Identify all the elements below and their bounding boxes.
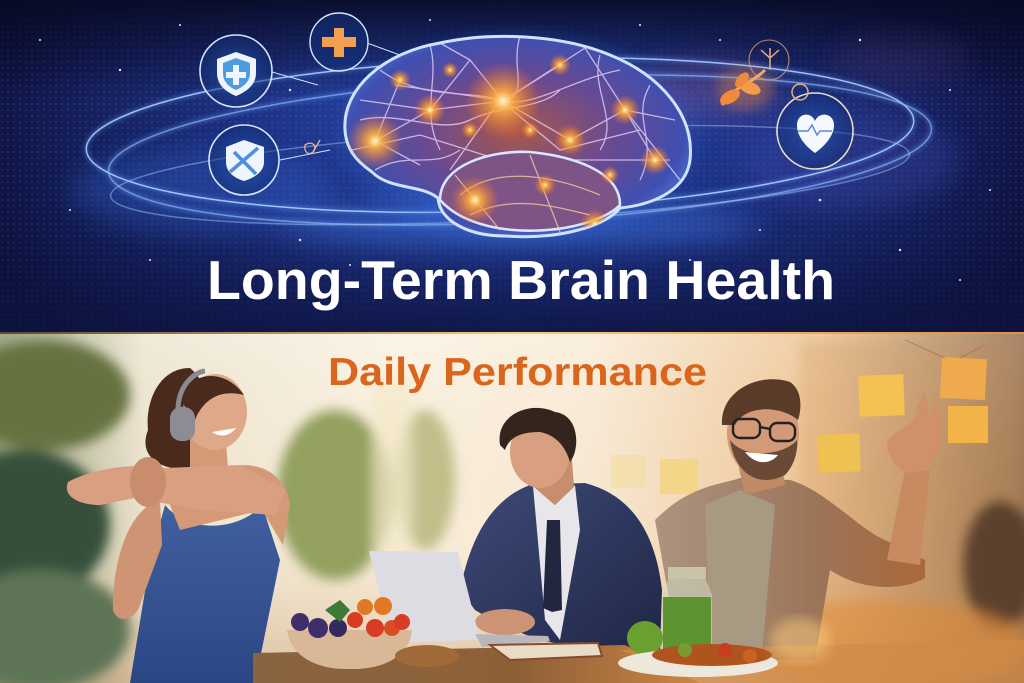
shirt: [533, 485, 580, 640]
person: man at laptop: [460, 408, 662, 650]
inner tee: [705, 490, 775, 655]
green smoothie jar: [662, 567, 712, 652]
person: woman stretching: [67, 368, 290, 683]
stars: [39, 19, 991, 281]
shirt: [655, 478, 925, 660]
divider line: [0, 332, 1024, 334]
broccoli: [627, 621, 663, 655]
tie: [543, 520, 562, 612]
torso top: [130, 505, 280, 683]
warm light overlay: [770, 618, 830, 662]
sticky notes: [611, 340, 988, 494]
nuts: [395, 645, 459, 667]
smile: [212, 428, 236, 435]
orbit rings: [82, 54, 936, 229]
beard: [730, 440, 797, 480]
icon: heart with pulse: [777, 84, 853, 169]
hand: [887, 392, 942, 473]
panel: daily performance: [0, 334, 1024, 683]
panel: long-term brain health: [0, 0, 1024, 333]
glasses: [733, 419, 795, 441]
left arm: [113, 500, 162, 619]
smile: [745, 452, 778, 462]
laptop: [369, 551, 550, 647]
face: [510, 432, 570, 488]
temporal lobe: [440, 152, 620, 231]
icon: shield with plus: [200, 35, 318, 107]
hair: [500, 408, 576, 462]
warm background right: [765, 338, 1024, 682]
trees left: [0, 340, 455, 683]
food plate: [618, 643, 778, 677]
hair: [145, 368, 200, 468]
fruit bowl: [287, 597, 412, 669]
neck: [530, 460, 574, 505]
table: [253, 645, 700, 683]
suit: [460, 483, 662, 650]
nebula glow: [70, 35, 970, 247]
neck: [735, 450, 785, 495]
hair: [722, 379, 800, 425]
icon: orange plant: [717, 40, 789, 110]
glowing neurons: [465, 63, 541, 139]
brain: [343, 31, 693, 238]
brain folds: [352, 36, 680, 180]
title: Long-Term Brain Health: [207, 249, 835, 311]
face: [183, 374, 247, 450]
raised arm: [887, 470, 930, 565]
icon: medical plus: [310, 13, 400, 71]
hands: [475, 609, 535, 635]
hand: [130, 457, 166, 507]
headphones: [178, 371, 205, 410]
icon: small leaf outline: [305, 140, 320, 154]
heading: Daily Performance: [328, 351, 707, 394]
person: man with glasses: [655, 379, 942, 660]
face: [727, 388, 799, 478]
notebook: [490, 643, 602, 660]
cross arm: [67, 465, 285, 515]
icon: shield with dna: [209, 125, 330, 195]
neck and shoulders: [170, 438, 290, 545]
